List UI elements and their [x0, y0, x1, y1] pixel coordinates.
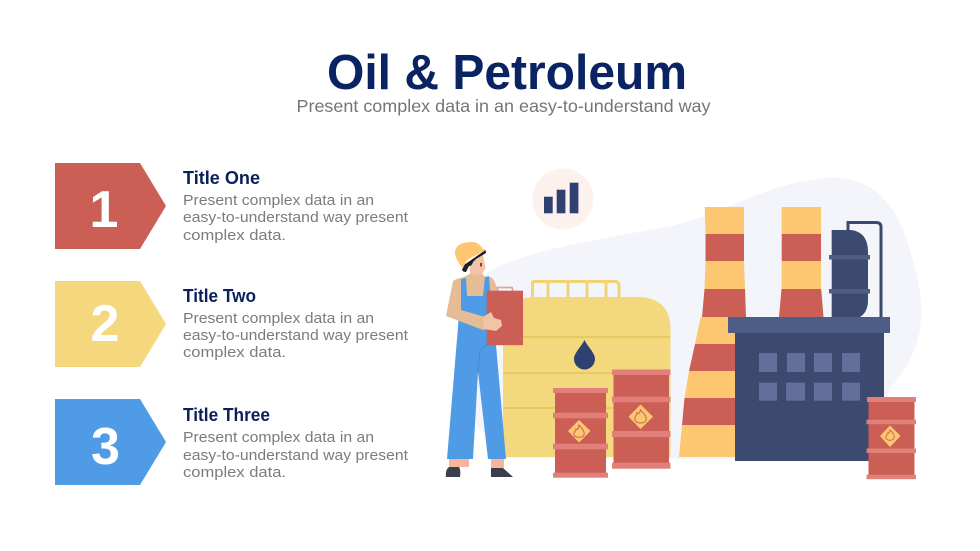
- mouth: [480, 263, 482, 266]
- arm: [446, 278, 502, 330]
- face: [469, 254, 486, 275]
- barrel 2: [612, 370, 670, 469]
- description two: Present complex data in an: [183, 311, 374, 327]
- jerry can: [498, 288, 513, 291]
- heading: title two: Title Two: [183, 286, 256, 306]
- tank railing: [532, 282, 619, 297]
- hair: [462, 250, 486, 272]
- neck and chest: [461, 272, 497, 300]
- heading: title one: Title One: [183, 168, 260, 188]
- heading: title three: Title Three: [183, 405, 270, 425]
- icon: oil drop: [574, 340, 595, 370]
- icon: bar chart badge: [532, 168, 594, 230]
- arrow badge 2: [55, 281, 166, 367]
- shoes: [446, 467, 513, 477]
- title: Oil & Petroleum: [327, 46, 687, 100]
- description three: [183, 430, 408, 481]
- hand: [483, 312, 502, 331]
- subtitle: Present complex data in an easy-to-understand way: [296, 96, 711, 116]
- description three: easy-to-understand way present: [183, 448, 408, 464]
- right cooling tower: [779, 207, 824, 317]
- description one: complex data.: [183, 228, 286, 244]
- description three: Present complex data in an: [183, 430, 374, 446]
- number 1: 1: [90, 181, 118, 239]
- windows: [759, 353, 860, 401]
- ankles: [449, 459, 469, 467]
- barrel 3: [866, 397, 916, 479]
- description two: [183, 311, 408, 361]
- worker figure: [446, 242, 523, 477]
- helmet: [455, 242, 486, 268]
- description one: Present complex data in an: [183, 193, 374, 209]
- description one: easy-to-understand way present: [183, 210, 408, 226]
- item three: [55, 399, 408, 485]
- number 2: 2: [91, 295, 119, 353]
- storage tank: [503, 282, 670, 457]
- description two: easy-to-understand way present: [183, 328, 408, 344]
- description three: complex data.: [183, 465, 286, 481]
- overalls: [447, 276, 506, 459]
- number 3: 3: [91, 418, 120, 476]
- factory building: [728, 317, 890, 461]
- illustration background blob: [458, 178, 921, 460]
- item two: [55, 281, 408, 367]
- left cooling tower: [679, 207, 746, 457]
- arrow badge 1: [55, 163, 166, 249]
- barrel 1: [553, 388, 608, 478]
- item one: [55, 163, 408, 249]
- arrow badge 3: [55, 399, 166, 485]
- pressure vessel and pipe: [829, 222, 881, 318]
- description two: complex data.: [183, 345, 286, 361]
- description one: [183, 193, 408, 244]
